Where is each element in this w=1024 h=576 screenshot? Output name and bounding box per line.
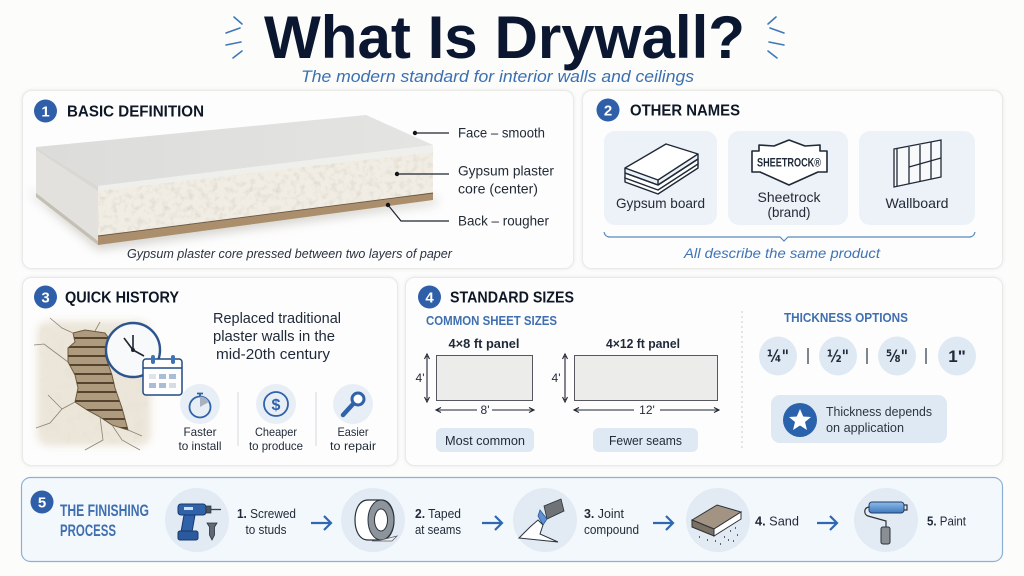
benefit: cheaper: $ — [272, 397, 281, 414]
benefit: easier: Easier — [338, 425, 369, 439]
heading: the finishing process: THE FINISHING — [60, 502, 149, 520]
step 4: sanding block — [686, 488, 750, 552]
heading: basic definition: BASIC DEFINITION — [67, 104, 204, 120]
note: same product: All describe the same product — [683, 245, 881, 261]
illustration: cracked plaster wall — [34, 318, 151, 450]
diagram: 4x8 panel — [416, 336, 534, 417]
panel: finishing process — [22, 478, 1002, 562]
panel: standard sizes — [406, 278, 1002, 466]
callout: core: core (center) — [458, 180, 538, 196]
badge 2 — [596, 98, 620, 122]
divider — [238, 392, 316, 446]
brace — [604, 232, 975, 241]
thickness chips: ¼" — [767, 347, 789, 367]
badge 1: 1 — [41, 104, 50, 120]
step 3 label: 3. Joint — [584, 506, 624, 521]
callout: face — [413, 124, 545, 140]
card: sheetrock — [728, 131, 848, 225]
tag: most common: Most common — [445, 433, 525, 448]
panel: other names — [582, 90, 1002, 268]
callout: back: Back – rougher — [458, 212, 549, 228]
title: What Is Drywall? — [264, 4, 745, 71]
diagram: 4x8 panel: 4×8 ft panel — [448, 336, 520, 351]
step 1 label: to studs — [246, 522, 287, 537]
step 2: tape roll — [341, 488, 405, 552]
callout: back — [386, 203, 549, 228]
history text: mid-20th century — [216, 347, 331, 363]
badge 1 — [34, 100, 57, 122]
callout: face: Face – smooth — [458, 124, 545, 140]
callout: core — [395, 162, 554, 196]
panel: basic definition — [22, 90, 574, 268]
heading: standard sizes: STANDARD SIZES — [450, 290, 574, 306]
thickness chips: ⅝" — [886, 347, 908, 367]
benefit: faster: to install — [178, 439, 222, 453]
history text: plaster walls in the — [213, 329, 335, 345]
callout: core: Gypsum plaster — [458, 162, 554, 178]
tag: fewer seams — [593, 428, 698, 452]
tag: most common — [436, 428, 534, 452]
drywall slab illustration — [26, 115, 440, 250]
arrow 1 — [311, 516, 331, 530]
subheading: thickness options: THICKNESS OPTIONS — [784, 311, 908, 325]
diagram: 4x12 panel — [552, 336, 719, 417]
step 1: drill — [165, 488, 229, 552]
decoration: right title rays — [768, 17, 784, 58]
subtitle: The modern standard for interior walls and ceilings — [301, 67, 695, 86]
benefit: easier: to repair — [330, 439, 376, 453]
arrow 4 — [817, 516, 837, 530]
benefit: cheaper — [249, 384, 303, 453]
card: gypsum board — [604, 131, 717, 225]
badge 4: 4 — [425, 290, 434, 306]
diagram: 4x12 panel: 12' — [639, 403, 655, 417]
card: wallboard — [859, 131, 975, 225]
panel: quick history — [22, 278, 398, 466]
note: thickness depends — [771, 395, 947, 443]
caption: Gypsum plaster core pressed between two layers of paper — [127, 246, 453, 261]
arrow 3 — [653, 516, 673, 530]
thickness chips: 1" — [948, 347, 966, 366]
step 3 label — [584, 506, 639, 537]
history text: Replaced traditional — [213, 311, 341, 327]
badge 5 — [30, 490, 54, 514]
badge 3: 3 — [41, 290, 50, 306]
step 5: paint roller — [854, 488, 918, 552]
heading: other names: OTHER NAMES — [630, 102, 740, 120]
benefit: cheaper: to produce — [249, 439, 303, 453]
step 3: joint compound knife — [513, 488, 577, 552]
icon: calendar — [143, 355, 182, 395]
benefit: cheaper: Cheaper — [255, 425, 297, 439]
diagram: 4x8 panel: 8' — [481, 403, 489, 417]
step 5 label: 5. Paint — [927, 514, 966, 528]
diagram: 4x8 panel: 4' — [416, 371, 424, 385]
icon: clock — [106, 323, 160, 377]
thickness chips: ½" — [827, 347, 849, 367]
tag: fewer seams: Fewer seams — [609, 433, 682, 448]
step 1 label — [237, 506, 296, 537]
badge 2: 2 — [604, 102, 612, 120]
benefit: easier — [330, 384, 376, 453]
step 2 label: 2. Taped — [415, 506, 461, 521]
diagram: 4x12 panel: 4' — [552, 371, 560, 385]
heading: the finishing process — [60, 502, 149, 540]
note: thickness depends: on application — [826, 420, 904, 435]
badge 5: 5 — [38, 494, 46, 512]
card: sheetrock: Sheetrock — [758, 189, 821, 205]
step 2 label — [415, 506, 461, 537]
heading: quick history: QUICK HISTORY — [65, 290, 179, 306]
card: gypsum board: Gypsum board — [616, 195, 705, 211]
subheading: common sheet sizes: COMMON SHEET SIZES — [426, 314, 557, 328]
step 4 label: 4. Sand — [755, 514, 799, 528]
icon: sheetrock badge: SHEETROCK® — [757, 156, 821, 170]
badge 3 — [34, 286, 57, 308]
badge 4 — [418, 286, 441, 308]
icon: wall frame — [894, 140, 941, 187]
step 2 label: at seams — [415, 522, 461, 537]
arrow 2 — [482, 516, 502, 530]
step 1 label: 1. Screwed — [237, 506, 296, 521]
card: wallboard: Wallboard — [886, 195, 948, 211]
diagram: 4x12 panel: 4×12 ft panel — [606, 336, 680, 351]
icon: board stack — [625, 144, 698, 194]
decoration: left title rays — [226, 17, 242, 58]
benefit: faster — [178, 384, 222, 453]
card: sheetrock: (brand) — [768, 204, 810, 220]
step 3 label: compound — [584, 522, 639, 537]
thickness chips — [759, 336, 976, 376]
note: thickness depends: Thickness depends — [826, 404, 932, 419]
heading: the finishing process: PROCESS — [60, 522, 116, 540]
history text — [213, 311, 341, 363]
benefit: faster: Faster — [184, 425, 216, 439]
